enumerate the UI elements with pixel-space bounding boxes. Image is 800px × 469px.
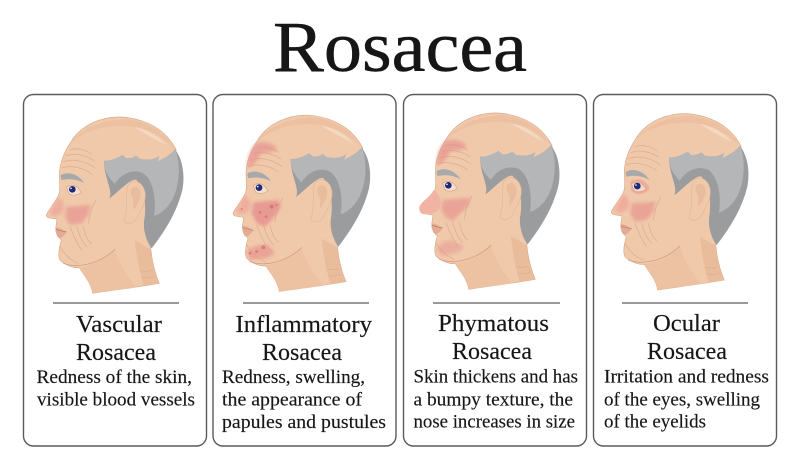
title: Rosacea bbox=[273, 7, 527, 87]
panel: phymatous rosacea bbox=[404, 94, 586, 446]
description: of the eyelids bbox=[604, 412, 706, 432]
card outline bbox=[594, 94, 776, 446]
panel: ocular rosacea bbox=[594, 94, 776, 446]
heading: Rosacea bbox=[452, 339, 532, 365]
card outline bbox=[213, 94, 396, 446]
panel: vascular rosacea bbox=[24, 94, 206, 446]
heading bbox=[438, 311, 549, 365]
description: of the eyes, swelling bbox=[604, 390, 760, 410]
card outline bbox=[24, 94, 206, 446]
description: nose increases in size bbox=[414, 412, 575, 432]
description: papules and pustules bbox=[222, 413, 386, 433]
illustration: head with redness on nose and cheek bbox=[46, 117, 183, 293]
description: Skin thickens and has bbox=[414, 368, 578, 388]
heading: Vascular bbox=[76, 312, 162, 338]
heading: Phymatous bbox=[438, 311, 549, 337]
heading: Inflammatory bbox=[236, 312, 372, 338]
description bbox=[604, 368, 769, 432]
description bbox=[222, 368, 386, 433]
description: a bumpy texture, the bbox=[414, 390, 573, 410]
description: Redness of the skin, bbox=[36, 368, 192, 388]
description: visible blood vessels bbox=[37, 390, 195, 410]
panel: inflammatory rosacea bbox=[213, 94, 396, 446]
illustration: head with enlarged nose bbox=[419, 113, 559, 289]
heading: Rosacea bbox=[76, 340, 156, 366]
illustration: head with papules and pustules bbox=[233, 115, 370, 292]
heading bbox=[76, 312, 162, 366]
description bbox=[36, 368, 195, 410]
description bbox=[414, 368, 578, 432]
description: Redness, swelling, bbox=[222, 368, 365, 388]
card outline bbox=[404, 94, 586, 446]
heading: Ocular bbox=[653, 311, 720, 337]
heading bbox=[236, 312, 372, 366]
heading: Rosacea bbox=[647, 339, 727, 365]
description: the appearance of bbox=[222, 390, 363, 410]
description: Irritation and redness bbox=[604, 368, 769, 388]
heading: Rosacea bbox=[262, 340, 342, 366]
illustration: head with red swollen eyes bbox=[611, 114, 748, 290]
heading bbox=[647, 311, 727, 365]
